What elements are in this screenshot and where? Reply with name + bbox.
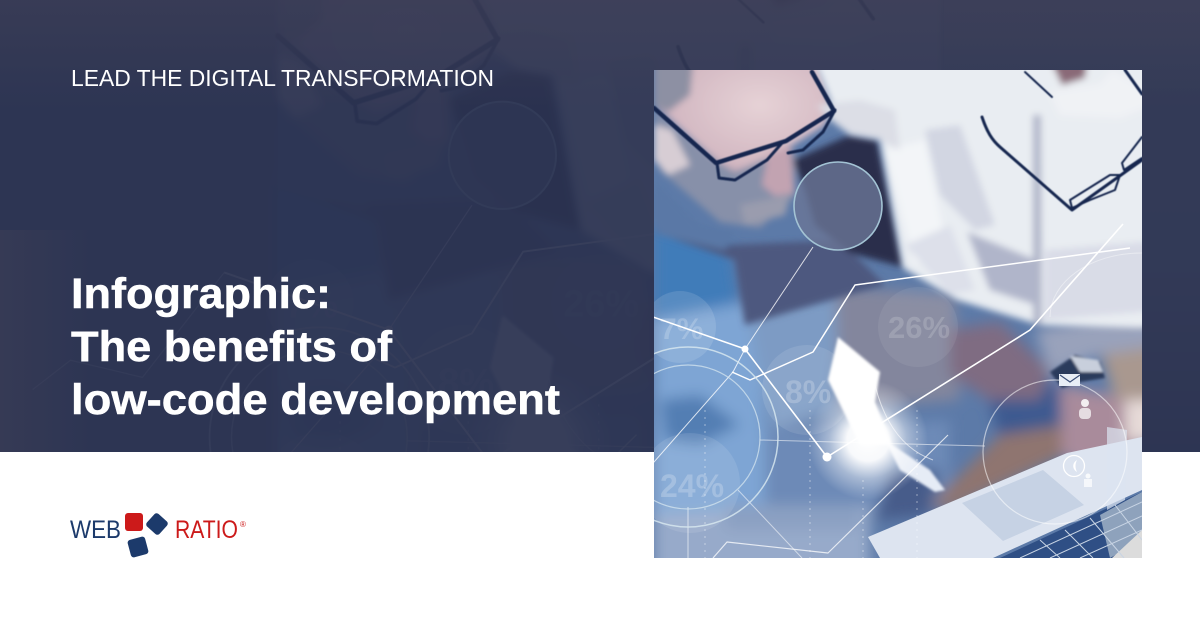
title: The benefits of: [71, 323, 393, 371]
WebRatio logo: RATIO: [175, 516, 238, 544]
title: low-code development: [71, 376, 560, 424]
main photo of two men with digital overlay: [654, 70, 1142, 558]
title: [71, 270, 560, 424]
title: Infographic:: [71, 270, 331, 318]
WebRatio logo: ®: [240, 520, 246, 529]
WebRatio logo: [70, 512, 246, 558]
white footer area: [0, 452, 1200, 628]
WebRatio logo: WEB: [70, 516, 121, 544]
eyebrow heading: LEAD THE DIGITAL TRANSFORMATION: [71, 65, 494, 91]
dark background band with faded photo: [0, 0, 1200, 452]
